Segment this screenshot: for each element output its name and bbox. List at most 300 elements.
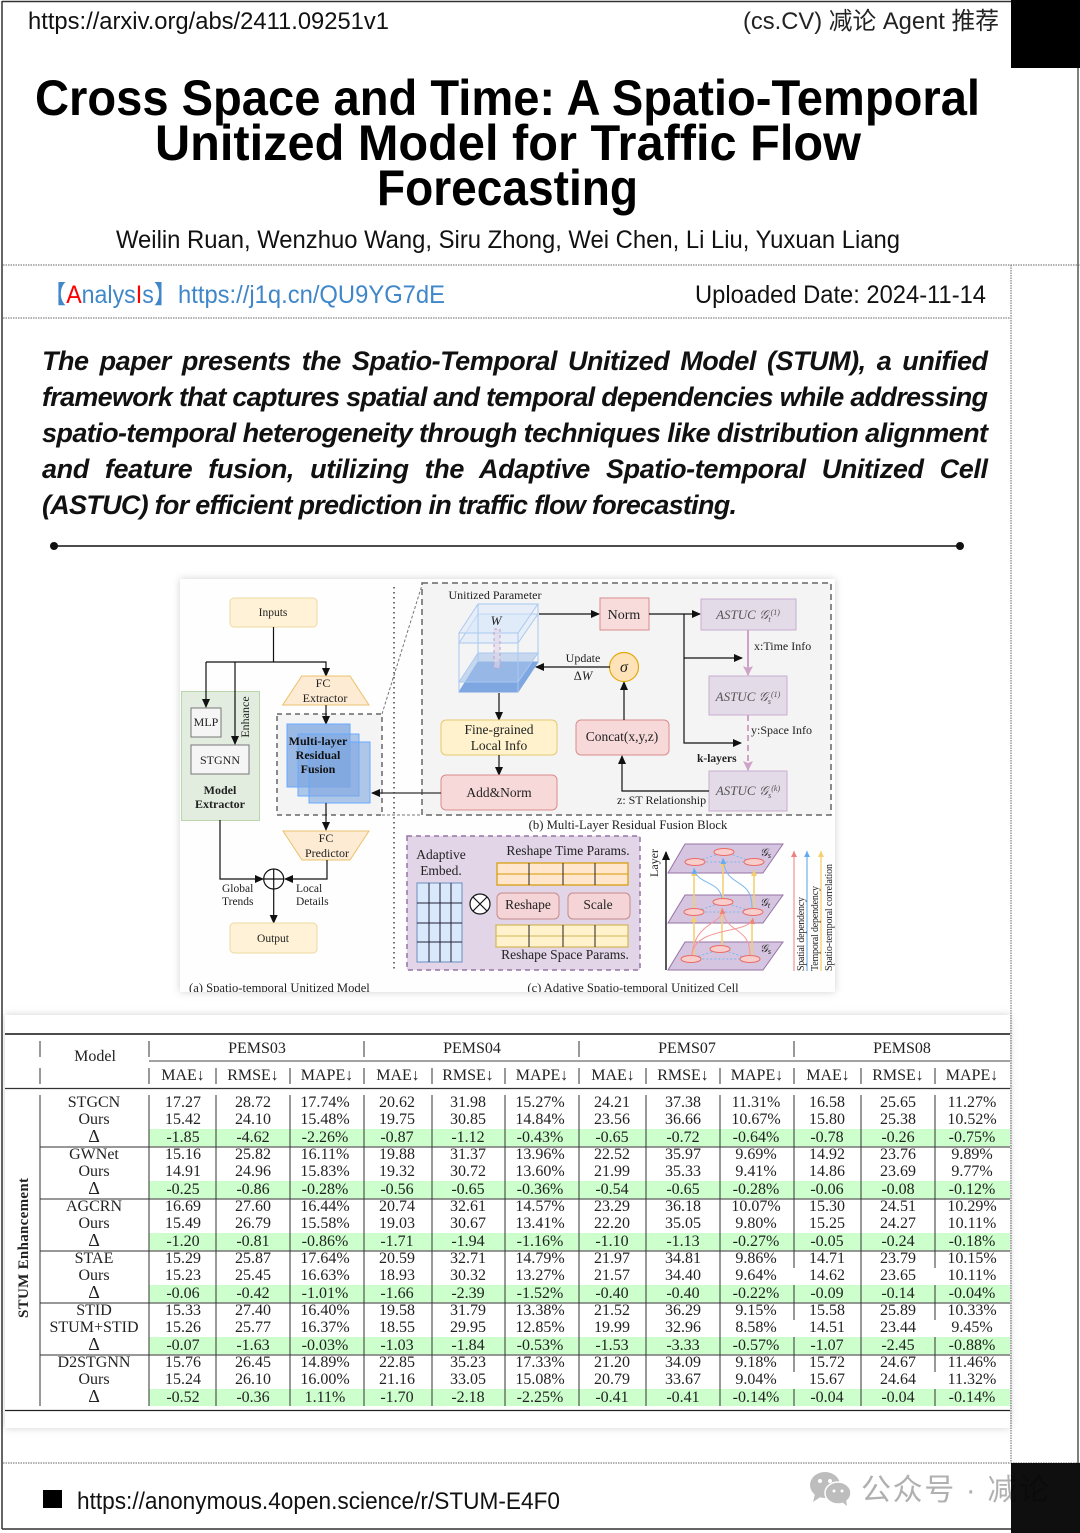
STID rows: 19.99 (594, 1319, 630, 1336)
GWNet rows: -0.28% (302, 1181, 348, 1198)
ASTUC t1 (701, 599, 796, 630)
GWNet rows: 16.11% (301, 1146, 349, 1163)
table header: MAPE↓ (946, 1067, 998, 1084)
STID rows: 14.51 (809, 1319, 845, 1336)
STAE rows: -1.66 (380, 1285, 414, 1302)
Model Extractor block: Extractor (195, 797, 246, 811)
summary paragraph (42, 346, 989, 520)
Add and Norm: Add&Norm (466, 785, 532, 800)
stacked graph layers (668, 844, 783, 970)
update arrow (536, 651, 610, 683)
STGCN rows: 14.84% (515, 1111, 565, 1128)
STID rows: 21.52 (594, 1302, 630, 1319)
STGCN rows: -0.87 (380, 1129, 414, 1146)
AGCRN rows: 19.03 (379, 1215, 415, 1232)
GWNet rows: 23.69 (880, 1163, 916, 1180)
FC Predictor (283, 803, 369, 860)
stacked graph layers: 𝒢 (760, 897, 768, 909)
STID rows (49, 1302, 997, 1354)
AGCRN rows: -1.10 (595, 1233, 629, 1250)
stacked graph layers: 𝒢 (760, 943, 768, 955)
AGCRN rows: Ours (78, 1215, 110, 1232)
GWNet rows: -0.25 (166, 1181, 200, 1198)
GWNet rows: GWNet (69, 1146, 119, 1163)
table header: MAE↓ (806, 1067, 850, 1084)
STAE rows: 10.15% (947, 1250, 997, 1267)
STID rows: 32.96 (665, 1319, 701, 1336)
STAE rows: 9.86% (735, 1250, 777, 1267)
D2STGNN rows: 9.18% (735, 1354, 777, 1371)
STID rows: -0.53% (517, 1337, 563, 1354)
STGCN rows: 25.65 (880, 1094, 916, 1111)
STID rows: 12.85% (515, 1319, 565, 1336)
STID rows: 9.45% (951, 1319, 993, 1336)
update arrow: ΔW (574, 669, 594, 683)
ASTUC t1: ASTUC 𝒢 (716, 607, 768, 622)
STAE rows: 30.32 (450, 1267, 486, 1284)
STID rows: 36.29 (665, 1302, 701, 1319)
STGCN rows: -0.75% (949, 1129, 995, 1146)
input routing arrows (206, 627, 326, 744)
STGCN rows: 28.72 (235, 1094, 271, 1111)
caption (c): (c) Adative Spatio-temporal Unitized Cell (527, 981, 739, 995)
GWNet rows: -0.12% (949, 1181, 995, 1198)
GWNet rows: 24.96 (235, 1163, 271, 1180)
summary paragraph: (ASTUC) for efficient prediction in traffic flow forecasting. (42, 490, 737, 520)
STGCN rows: Δ (88, 1126, 100, 1146)
GWNet rows: 25.82 (235, 1146, 271, 1163)
section rule with end dots (50, 542, 964, 550)
AGCRN rows: 16.69 (165, 1198, 201, 1215)
panel: (c) adaptive spatio-temporal unitized cell (407, 836, 835, 995)
rotated group label: STUM Enhancement (16, 1178, 32, 1318)
AGCRN rows: 10.11% (948, 1215, 996, 1232)
D2STGNN rows: 9.04% (735, 1371, 777, 1388)
GWNet rows: Ours (78, 1163, 110, 1180)
D2STGNN rows: 26.45 (235, 1354, 271, 1371)
ASTUC sk: ASTUC 𝒢 (716, 783, 768, 798)
global and local fusion node: Global (222, 883, 253, 895)
GWNet rows: 15.83% (300, 1163, 350, 1180)
time info arrow (748, 630, 811, 675)
Output box (230, 923, 317, 953)
table header: PEMS03 (228, 1040, 286, 1057)
Norm box: Norm (608, 608, 640, 623)
STID rows: -1.03 (380, 1337, 414, 1354)
STGCN rows: 17.27 (165, 1094, 201, 1111)
STGCN rows: 31.98 (450, 1094, 486, 1111)
STAE rows: 9.64% (735, 1267, 777, 1284)
layer axis (647, 849, 666, 970)
AGCRN rows: 15.58% (300, 1215, 350, 1232)
FC Predictor: FC (319, 831, 333, 845)
black corner block: top right (1011, 0, 1080, 68)
STAE rows: Δ (88, 1282, 100, 1302)
D2STGNN rows: 24.64 (880, 1371, 916, 1388)
GWNet rows: -0.06 (810, 1181, 844, 1198)
D2STGNN rows: -0.04 (881, 1389, 915, 1406)
ASTUC t1: (1) (771, 608, 780, 617)
STAE rows (75, 1250, 997, 1302)
Reshape button: Reshape (505, 897, 551, 912)
watermark text: 公众号 · 减论 (861, 1474, 1049, 1507)
AGCRN rows: 20.74 (379, 1198, 415, 1215)
ST relationship arrow: z: ST Relationship (617, 793, 706, 807)
title: Forecasting (377, 160, 638, 216)
upload date: Uploaded Date: 2024-11-14 (695, 281, 986, 309)
STID rows: -1.84 (451, 1337, 485, 1354)
ASTUC sk: s (768, 791, 771, 800)
STAE rows: -0.09 (810, 1285, 844, 1302)
time info arrow: x:Time Info (754, 639, 811, 653)
STAE rows: 23.65 (880, 1267, 916, 1284)
GWNet rows: 19.88 (379, 1146, 415, 1163)
GWNet rows: 9.69% (735, 1146, 777, 1163)
GWNet rows: -0.86 (236, 1181, 270, 1198)
D2STGNN rows: Ours (78, 1371, 110, 1388)
AGCRN rows: 10.07% (731, 1198, 781, 1215)
dependency legend: Spatial dependency (796, 897, 807, 971)
AGCRN rows: 9.80% (735, 1215, 777, 1232)
STID rows: 25.77 (235, 1319, 271, 1336)
D2STGNN rows: 20.79 (594, 1371, 630, 1388)
AGCRN rows (66, 1198, 997, 1250)
space info arrow: k-layers (697, 753, 737, 765)
AGCRN rows: 27.60 (235, 1198, 271, 1215)
AGCRN rows: -1.94 (451, 1233, 485, 1250)
STID rows: 9.15% (735, 1302, 777, 1319)
table header: Model (74, 1048, 116, 1065)
ASTUC sk: (k) (771, 784, 780, 793)
STAE rows: Ours (78, 1267, 110, 1284)
table header: PEMS07 (658, 1040, 716, 1057)
time params grid (497, 843, 630, 885)
table header: RMSE↓ (872, 1067, 924, 1084)
AGCRN rows: 22.20 (594, 1215, 630, 1232)
caption (a): (a) Spatio-temporal Unitized Model (189, 981, 370, 995)
STAE rows: 34.81 (665, 1250, 701, 1267)
STID rows: 19.58 (379, 1302, 415, 1319)
D2STGNN rows: -0.52 (166, 1389, 200, 1406)
STGCN rows: 10.52% (947, 1111, 997, 1128)
GWNet rows: 19.32 (379, 1163, 415, 1180)
STAE rows: 14.62 (809, 1267, 845, 1284)
GWNet rows: 15.16 (165, 1146, 201, 1163)
STID rows: -0.57% (733, 1337, 779, 1354)
summary paragraph: framework that captures spatial and temporal dependencies while addressing (42, 382, 988, 412)
tensor product symbol (470, 894, 490, 914)
STGCN rows: -0.78 (810, 1129, 844, 1146)
D2STGNN rows: 34.09 (665, 1354, 701, 1371)
AGCRN rows: -1.71 (380, 1233, 414, 1250)
GWNet rows: 14.91 (165, 1163, 201, 1180)
GWNet rows: -0.54 (595, 1181, 629, 1198)
AGCRN rows: 15.25 (809, 1215, 845, 1232)
AGCRN rows: 36.18 (665, 1198, 701, 1215)
ASTUC s1: s (768, 697, 771, 706)
STGCN rows: Ours (78, 1111, 110, 1128)
STAE rows: 18.93 (379, 1267, 415, 1284)
stacked graph layers: t (768, 901, 771, 910)
Multi-layer Residual Fusion dashed block (277, 705, 382, 815)
STGCN rows: -4.62 (236, 1129, 270, 1146)
analysis link: https://j1q.cn/QU9YG7dE (178, 281, 445, 309)
table header: PEMS08 (873, 1040, 931, 1057)
STAE rows: -0.06 (166, 1285, 200, 1302)
FC Extractor: Extractor (303, 691, 347, 705)
table header: MAE↓ (376, 1067, 420, 1084)
Fine-grained Local Info (441, 720, 557, 755)
D2STGNN rows: 15.67 (809, 1371, 845, 1388)
stacked graph layers: 𝒢 (760, 847, 768, 859)
STGCN rows (68, 1094, 997, 1146)
panel divider lines (382, 585, 422, 972)
GWNet rows: 13.60% (515, 1163, 565, 1180)
table header: RMSE↓ (657, 1067, 709, 1084)
space info arrow (697, 715, 812, 770)
STGCN rows: 16.58 (809, 1094, 845, 1111)
STID rows: -1.53 (595, 1337, 629, 1354)
STGCN rows: -0.26 (881, 1129, 915, 1146)
D2STGNN rows (58, 1354, 996, 1406)
dependency legend: Temporal dependency (810, 886, 821, 971)
AGCRN rows: 15.30 (809, 1198, 845, 1215)
D2STGNN rows: 22.85 (379, 1354, 415, 1371)
STGCN rows: 10.67% (731, 1111, 781, 1128)
table header: PEMS04 (443, 1040, 501, 1057)
STID rows: STID (76, 1302, 112, 1319)
STID rows: 10.33% (947, 1302, 997, 1319)
D2STGNN rows: 11.46% (948, 1354, 996, 1371)
STAE rows: 15.23 (165, 1267, 201, 1284)
D2STGNN rows: -0.04 (810, 1389, 844, 1406)
analysis link: 【AnalysIs】 (43, 281, 177, 309)
STID rows: 25.89 (880, 1302, 916, 1319)
STGCN rows: -0.65 (595, 1129, 629, 1146)
D2STGNN rows: 15.72 (809, 1354, 845, 1371)
stacked graph layers: s (768, 947, 771, 956)
STAE rows: -0.40 (666, 1285, 700, 1302)
STAE rows: 15.29 (165, 1250, 201, 1267)
GWNet rows: -0.36% (517, 1181, 563, 1198)
GWNet rows: 23.76 (880, 1146, 916, 1163)
GWNet rows: Δ (88, 1178, 100, 1198)
AGCRN rows: 24.51 (880, 1198, 916, 1215)
STAE rows: -0.42 (236, 1285, 270, 1302)
STGCN rows: 17.74% (300, 1094, 350, 1111)
panel: (b) multi-layer residual fusion block (372, 583, 831, 832)
Concat box: Concat(x,y,z) (586, 729, 658, 744)
Norm output arrows (649, 614, 742, 743)
D2STGNN rows: Δ (88, 1386, 100, 1406)
GWNet rows: 35.97 (665, 1146, 701, 1163)
STAE rows: 16.63% (300, 1267, 350, 1284)
black corner block: bottom right (1011, 1463, 1080, 1533)
AGCRN rows: 23.29 (594, 1198, 630, 1215)
space params grid (496, 925, 629, 962)
STGCN rows: 23.56 (594, 1111, 630, 1128)
Concat box (576, 720, 669, 755)
Multi-layer Residual Fusion dashed block: Fusion (301, 762, 336, 776)
STAE rows: -1.01% (302, 1285, 348, 1302)
AGCRN rows: Δ (88, 1230, 100, 1250)
Output box: Output (257, 933, 290, 945)
update arrow: Update (566, 651, 600, 665)
STAE rows: 17.64% (300, 1250, 350, 1267)
STID rows: -2.45 (881, 1337, 915, 1354)
ASTUC sk (709, 771, 787, 811)
global and local fusion node: Details (296, 896, 329, 908)
AGCRN rows: 32.61 (450, 1198, 486, 1215)
AGCRN rows: -1.13 (666, 1233, 700, 1250)
GWNet rows: 13.96% (515, 1146, 565, 1163)
STGCN rows: 15.42 (165, 1111, 201, 1128)
STID rows: 16.40% (300, 1302, 350, 1319)
AGCRN rows: -0.86% (302, 1233, 348, 1250)
STAE rows: 21.97 (594, 1250, 630, 1267)
D2STGNN rows: 24.67 (880, 1354, 916, 1371)
layer axis: Layer (647, 849, 661, 877)
title (35, 70, 980, 216)
STAE rows: -1.52% (517, 1285, 563, 1302)
FC Predictor: Predictor (305, 846, 349, 860)
caption (b): (b) Multi-Layer Residual Fusion Block (529, 818, 728, 832)
AGCRN rows: -0.27% (733, 1233, 779, 1250)
STAE rows: -0.14 (881, 1285, 915, 1302)
STID rows: -0.03% (302, 1337, 348, 1354)
STGCN rows: 24.21 (594, 1094, 630, 1111)
STID rows: -3.33 (666, 1337, 700, 1354)
code link: https://anonymous.4open.science/r/STUM-E4F0 (77, 1488, 560, 1515)
STID rows: 13.38% (515, 1302, 565, 1319)
global and local fusion node: Local (296, 883, 322, 895)
architecture figure (180, 579, 835, 995)
ASTUC t1: t (768, 615, 771, 624)
STAE rows: 14.79% (515, 1250, 565, 1267)
AGCRN rows: 15.49 (165, 1215, 201, 1232)
title: Unitized Model for Traffic Flow (155, 115, 861, 171)
STID rows: -0.88% (949, 1337, 995, 1354)
STID rows: 15.33 (165, 1302, 201, 1319)
GWNet rows: -0.56 (380, 1181, 414, 1198)
D2STGNN rows: 33.67 (665, 1371, 701, 1388)
STID rows: 27.40 (235, 1302, 271, 1319)
STID rows: 16.37% (300, 1319, 350, 1336)
D2STGNN rows: 11.32% (948, 1371, 996, 1388)
GWNet rows: 35.33 (665, 1163, 701, 1180)
STID rows: 18.55 (379, 1319, 415, 1336)
global and local fusion node: Trends (222, 896, 254, 908)
AGCRN rows: AGCRN (66, 1198, 122, 1215)
STGCN rows: 20.62 (379, 1094, 415, 1111)
table header: RMSE↓ (442, 1067, 494, 1084)
AGCRN rows: 24.27 (880, 1215, 916, 1232)
table header: MAE↓ (591, 1067, 635, 1084)
results table (5, 1015, 1010, 1428)
icon: wechat bubbles (810, 1472, 851, 1506)
STAE rows: 10.11% (948, 1267, 996, 1284)
STAE rows: -0.04% (949, 1285, 995, 1302)
STGCN rows: -0.64% (733, 1129, 779, 1146)
FC Extractor (283, 676, 369, 705)
AGCRN rows: -0.24 (881, 1233, 915, 1250)
category and recommendation: (cs.CV) 减论 Agent 推荐 (743, 8, 999, 35)
D2STGNN rows: 21.20 (594, 1354, 630, 1371)
STAE rows: 32.71 (450, 1250, 486, 1267)
FC Extractor: FC (316, 676, 330, 690)
footer square bullet (43, 1490, 62, 1508)
summary paragraph: The paper presents the Spatio-Temporal Unitized Model (STUM), a unified (42, 346, 988, 376)
AGCRN rows: 14.57% (515, 1198, 565, 1215)
STID rows: -1.07 (810, 1337, 844, 1354)
AGCRN rows: -1.20 (166, 1233, 200, 1250)
Fine-grained Local Info: Fine-grained (465, 722, 534, 737)
STGCN rows: -1.85 (166, 1129, 200, 1146)
STGCN rows: 30.85 (450, 1111, 486, 1128)
AGCRN rows: -1.16% (517, 1233, 563, 1250)
panel: (b) multi-layer residual fusion block: Unitized Parameter (449, 588, 541, 602)
AGCRN rows: 35.05 (665, 1215, 701, 1232)
AGCRN rows: 26.79 (235, 1215, 271, 1232)
Inputs box (230, 598, 317, 627)
Model Extractor block (182, 692, 260, 820)
ASTUC s1: (1) (771, 690, 781, 699)
authors: Weilin Ruan, Wenzhuo Wang, Siru Zhong, Wei Chen, Li Liu, Yuxuan Liang (116, 226, 900, 254)
STID rows: Δ (88, 1334, 100, 1354)
STGCN rows: -0.43% (517, 1129, 563, 1146)
ASTUC s1: ASTUC 𝒢 (716, 689, 768, 704)
parameter cube W: W (491, 613, 503, 628)
GWNet rows: 9.41% (735, 1163, 777, 1180)
Multi-layer Residual Fusion dashed block: Multi-layer (289, 734, 348, 748)
STGCN rows: 36.66 (665, 1111, 701, 1128)
Inputs box: Inputs (259, 607, 288, 619)
GWNet rows: 21.99 (594, 1163, 630, 1180)
Norm box (600, 598, 649, 630)
D2STGNN rows: -2.18 (451, 1389, 485, 1406)
panel: (a) spatio-temporal unitized model (182, 598, 382, 995)
summary paragraph: and feature fusion, utilizing the Adaptive Spatio-temporal Unitized Cell (42, 454, 988, 484)
D2STGNN rows: 17.33% (515, 1354, 565, 1371)
AGCRN rows: 10.29% (947, 1198, 997, 1215)
watermark (810, 1472, 1049, 1507)
sigma node (610, 652, 638, 720)
table header: RMSE↓ (227, 1067, 279, 1084)
D2STGNN rows: 1.11% (305, 1389, 345, 1406)
Adaptive Embed label (416, 847, 466, 878)
global and local fusion node (220, 820, 329, 923)
Adaptive Embed label: Adaptive (416, 847, 466, 862)
GWNet rows: 9.89% (951, 1146, 993, 1163)
Add and Norm (441, 775, 557, 810)
STGCN rows: 11.27% (948, 1094, 996, 1111)
STGCN rows: 25.38 (880, 1111, 916, 1128)
D2STGNN rows: 15.24 (165, 1371, 201, 1388)
table header: MAPE↓ (301, 1067, 353, 1084)
table header (74, 1040, 998, 1084)
STAE rows: 25.87 (235, 1250, 271, 1267)
AGCRN rows: 16.44% (300, 1198, 350, 1215)
STGCN rows: -2.26% (302, 1129, 348, 1146)
D2STGNN rows: D2STGNN (58, 1354, 131, 1371)
STGCN rows: -1.12 (451, 1129, 485, 1146)
D2STGNN rows: 21.16 (379, 1371, 415, 1388)
GWNet rows (69, 1146, 995, 1198)
Reshape button (497, 893, 559, 919)
STAE rows: 25.45 (235, 1267, 271, 1284)
D2STGNN rows: -1.70 (380, 1389, 414, 1406)
D2STGNN rows: -2.25% (517, 1389, 563, 1406)
